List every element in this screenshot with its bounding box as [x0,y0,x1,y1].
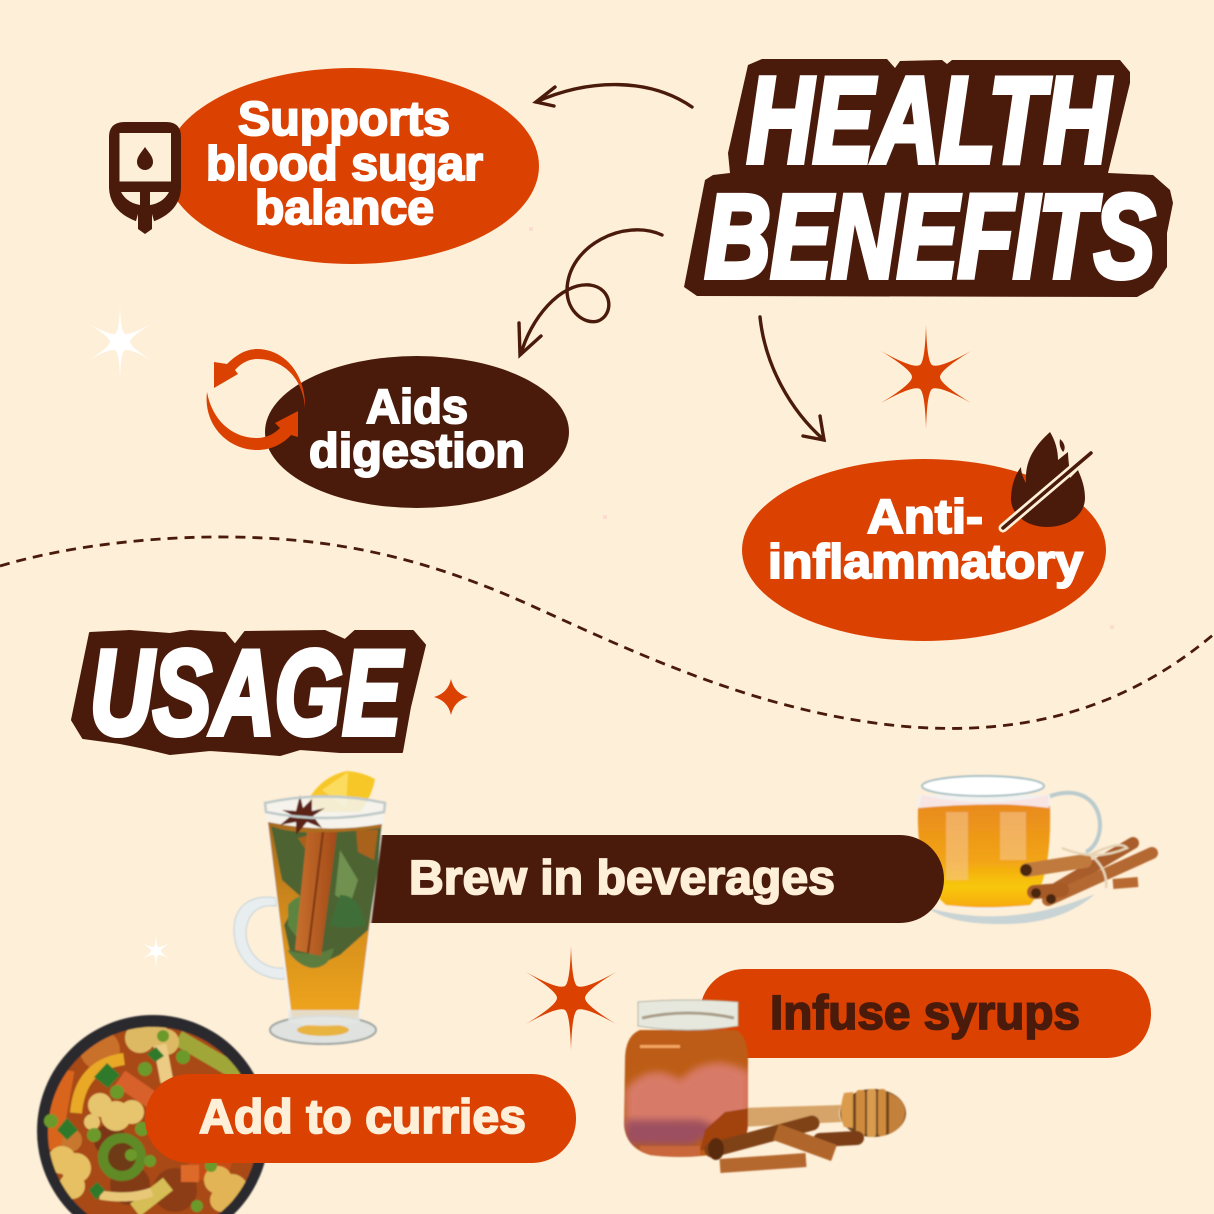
pill shape [145,1074,576,1163]
label: supports blood sugar balance [206,93,483,235]
arrow: to anti-inflammatory [760,317,824,440]
sparkle: white lower-left [140,932,172,970]
label: anti-inflammatory: inflammatory [768,536,1083,589]
pill label: Brew in beverages [409,852,835,905]
panel: blood sugar benefit [109,68,539,264]
pill shape [700,969,1151,1058]
image: honey jar with dipper and cinnamon [620,1000,906,1166]
orange ellipse [742,459,1106,641]
panel: digestion benefit [207,349,569,508]
sparkle: white upper-left [88,305,152,379]
label: supports blood sugar balance: Supports [238,93,450,146]
sparkle: small orange near usage [434,679,468,715]
pill label: Add to curries [199,1091,526,1144]
pill: brew in beverages [360,835,944,923]
label: aids digestion: Aids [366,381,468,434]
title: Usage [72,626,425,760]
icon: crossed-out flame [1003,432,1091,528]
usage text: USAGE [90,626,404,760]
label: aids digestion: digestion [309,425,525,478]
sparkle: orange upper-right [881,325,971,429]
label: anti-inflammatory: Anti- [867,491,983,544]
faint specks [529,227,1114,629]
usage backing shape [72,631,425,755]
label: anti-inflammatory [768,491,1083,589]
pill label: Infuse syrups [770,987,1080,1040]
panel: anti-inflammatory benefit [742,432,1106,641]
image: tall tea glass with cinnamon [234,771,385,1044]
pill: add to curries [145,1074,576,1163]
brown ellipse [265,356,569,508]
orange ellipse [165,68,539,264]
dashed divider curve [0,537,1214,728]
pill shape [360,835,944,923]
sparkle: orange lower-center [526,946,616,1050]
arrow: to digestion with loop [519,230,662,355]
label: supports blood sugar balance: balance [255,182,434,235]
arrow: to blood sugar [536,85,692,107]
pill: infuse syrups [700,969,1151,1058]
icon: glucose meter [109,122,181,234]
icon: cycle arrows [207,349,305,450]
image: bowl of curry [37,1015,269,1214]
label: supports blood sugar balance: blood sugar [206,138,483,191]
label: aids digestion [309,381,525,478]
title: Health Benefits [684,52,1173,303]
image: tea mug with cinnamon bundle [918,776,1152,924]
title backing shape [684,59,1173,297]
